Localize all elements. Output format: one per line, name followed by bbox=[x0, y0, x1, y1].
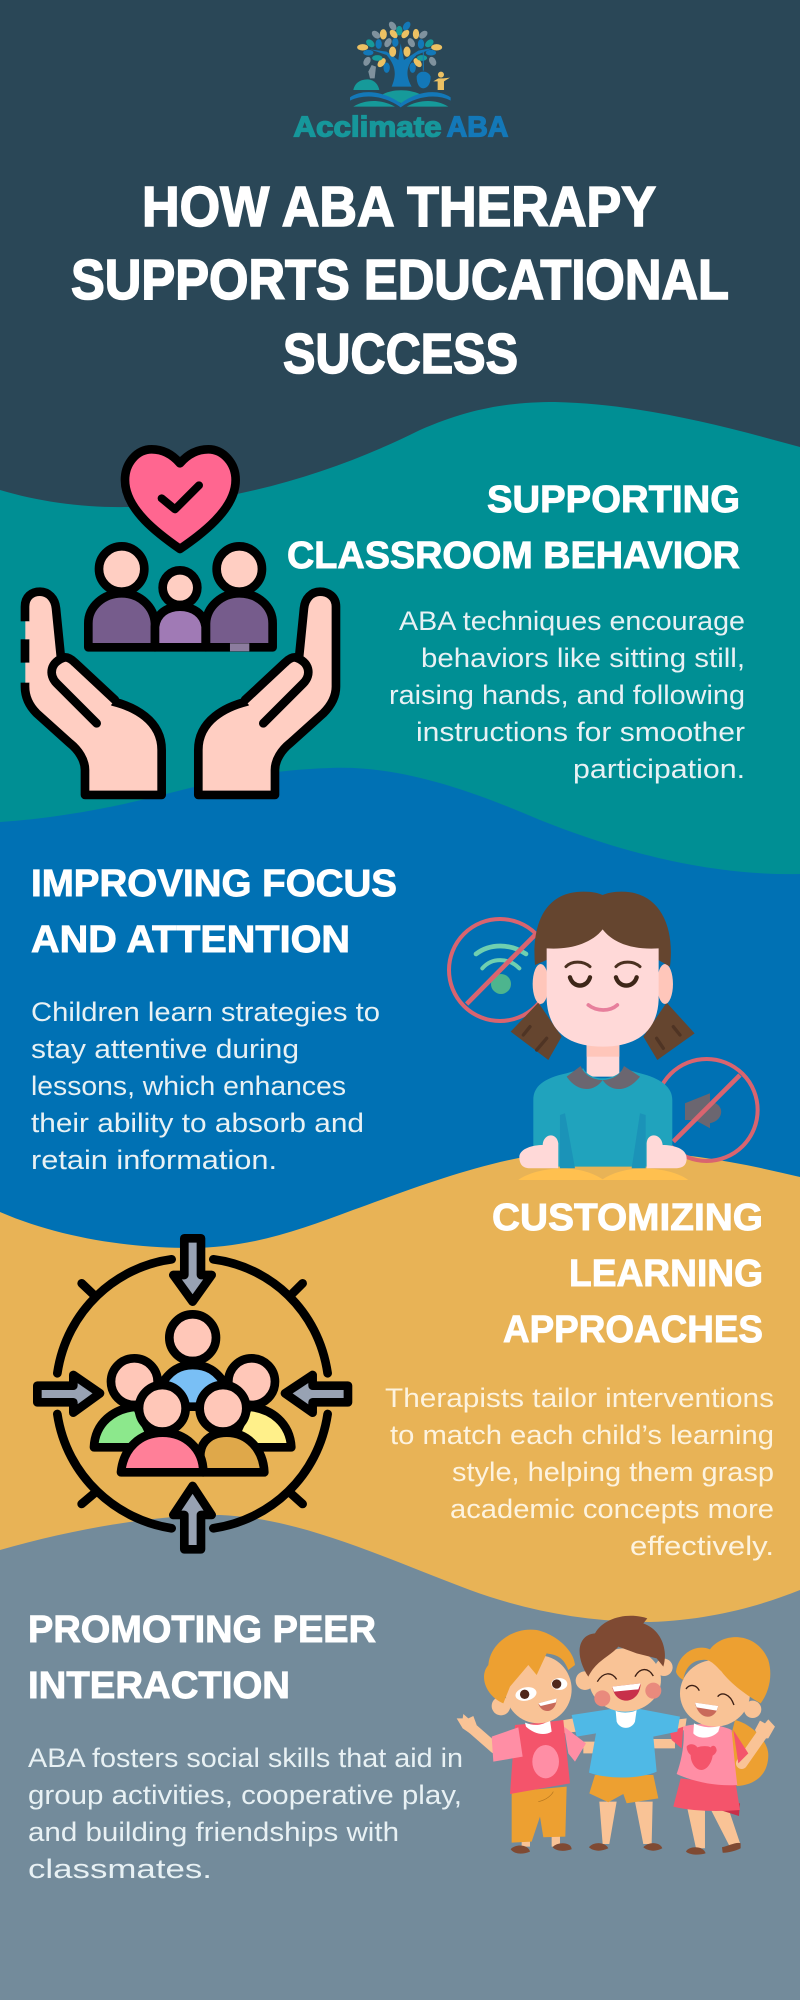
icon: target with group and converging arrows bbox=[37, 1238, 348, 1549]
title: SUCCESS bbox=[283, 322, 518, 386]
text: promoting peer interaction body: classmates. bbox=[28, 1854, 212, 1884]
panel: blue wave bbox=[0, 768, 800, 1300]
text: improving focus body bbox=[31, 997, 380, 1175]
text: supporting classroom behavior body: ABA techniques encourage bbox=[399, 606, 745, 636]
text: improving focus body: their ability to absorb and bbox=[31, 1108, 364, 1138]
logo wordmark: Acclimate bbox=[293, 112, 442, 144]
heading: customizing learning approaches: LEARNING bbox=[569, 1253, 763, 1295]
text: promoting peer interaction body: group activities, cooperative play, bbox=[28, 1780, 462, 1810]
heading: improving focus and attention: IMPROVING FOCUS bbox=[31, 863, 397, 905]
heading: supporting classroom behavior bbox=[287, 479, 740, 577]
text: supporting classroom behavior body: behaviors like sitting still, bbox=[421, 643, 745, 673]
illustration: girl on right bbox=[670, 1637, 775, 1855]
heading: customizing learning approaches: APPROACHES bbox=[503, 1309, 763, 1351]
illustration: boy in centre bbox=[572, 1616, 680, 1851]
text: supporting classroom behavior body: instructions for smoother bbox=[416, 717, 745, 747]
icon: girl reading, ignoring distractions bbox=[449, 892, 758, 1180]
logo: Acclimate ABA bbox=[293, 21, 508, 144]
title: SUPPORTS EDUCATIONAL bbox=[71, 248, 729, 312]
text: customizing learning body: style, helping them grasp bbox=[452, 1457, 774, 1487]
heading: supporting classroom behavior: CLASSROOM BEHAVIOR bbox=[287, 535, 740, 577]
text: supporting classroom behavior body bbox=[389, 606, 745, 784]
text: improving focus body: retain information. bbox=[31, 1145, 277, 1175]
heading: promoting peer interaction bbox=[28, 1609, 376, 1707]
text: supporting classroom behavior body: raising hands, and following bbox=[389, 680, 745, 710]
heading: supporting classroom behavior: SUPPORTING bbox=[487, 479, 740, 521]
logo wordmark: ABA bbox=[447, 112, 508, 144]
icon: right hand bbox=[198, 592, 336, 795]
text: promoting peer interaction body: and building friendships with bbox=[28, 1817, 399, 1847]
illustration: three happy children bbox=[457, 1616, 775, 1855]
illustration: girl figure bbox=[511, 892, 695, 1180]
title bbox=[71, 175, 729, 386]
icon: heart with check bbox=[125, 449, 236, 549]
text: improving focus body: stay attentive during bbox=[31, 1034, 299, 1064]
heading: promoting peer interaction: PROMOTING PEER bbox=[28, 1609, 376, 1651]
illustration: linked arms behind bbox=[555, 1718, 687, 1753]
icon: left hand bbox=[20, 592, 162, 795]
icon: hands holding family with heart bbox=[20, 449, 336, 795]
heading: improving focus and attention: AND ATTENTION bbox=[31, 919, 350, 961]
icon: tree bbox=[350, 21, 451, 107]
panel: teal wave bbox=[0, 402, 800, 900]
icon: no wifi bbox=[449, 919, 551, 1021]
text: customizing learning body: effectively. bbox=[630, 1531, 774, 1561]
heading: promoting peer interaction: INTERACTION bbox=[28, 1665, 290, 1707]
icon: four arrows bbox=[37, 1238, 348, 1549]
text: supporting classroom behavior body: participation. bbox=[573, 754, 745, 784]
icon: no sound bbox=[656, 1059, 758, 1161]
text: customizing learning body: academic concepts more bbox=[450, 1494, 774, 1524]
heading: improving focus and attention bbox=[31, 863, 397, 961]
icon: family of three bbox=[88, 546, 273, 651]
text: improving focus body: lessons, which enhances bbox=[31, 1071, 346, 1101]
title: HOW ABA THERAPY bbox=[142, 175, 656, 239]
text: promoting peer interaction body bbox=[28, 1743, 463, 1884]
panel: slate wave bbox=[0, 1515, 800, 2000]
heading: customizing learning approaches: CUSTOMIZING bbox=[492, 1197, 763, 1239]
icon: group of five people bbox=[94, 1314, 291, 1472]
text: customizing learning body bbox=[385, 1383, 774, 1561]
text: customizing learning body: Therapists tailor interventions bbox=[385, 1383, 774, 1413]
illustration: boy on left bbox=[457, 1630, 586, 1854]
icon: target ring bbox=[57, 1259, 328, 1528]
heading: customizing learning approaches bbox=[492, 1197, 763, 1351]
panel: gold wave bbox=[0, 1150, 800, 1700]
text: customizing learning body: to match each child’s learning bbox=[390, 1420, 774, 1450]
text: improving focus body: Children learn strategies to bbox=[31, 997, 380, 1027]
text: promoting peer interaction body: ABA fosters social skills that aid in bbox=[28, 1743, 463, 1773]
